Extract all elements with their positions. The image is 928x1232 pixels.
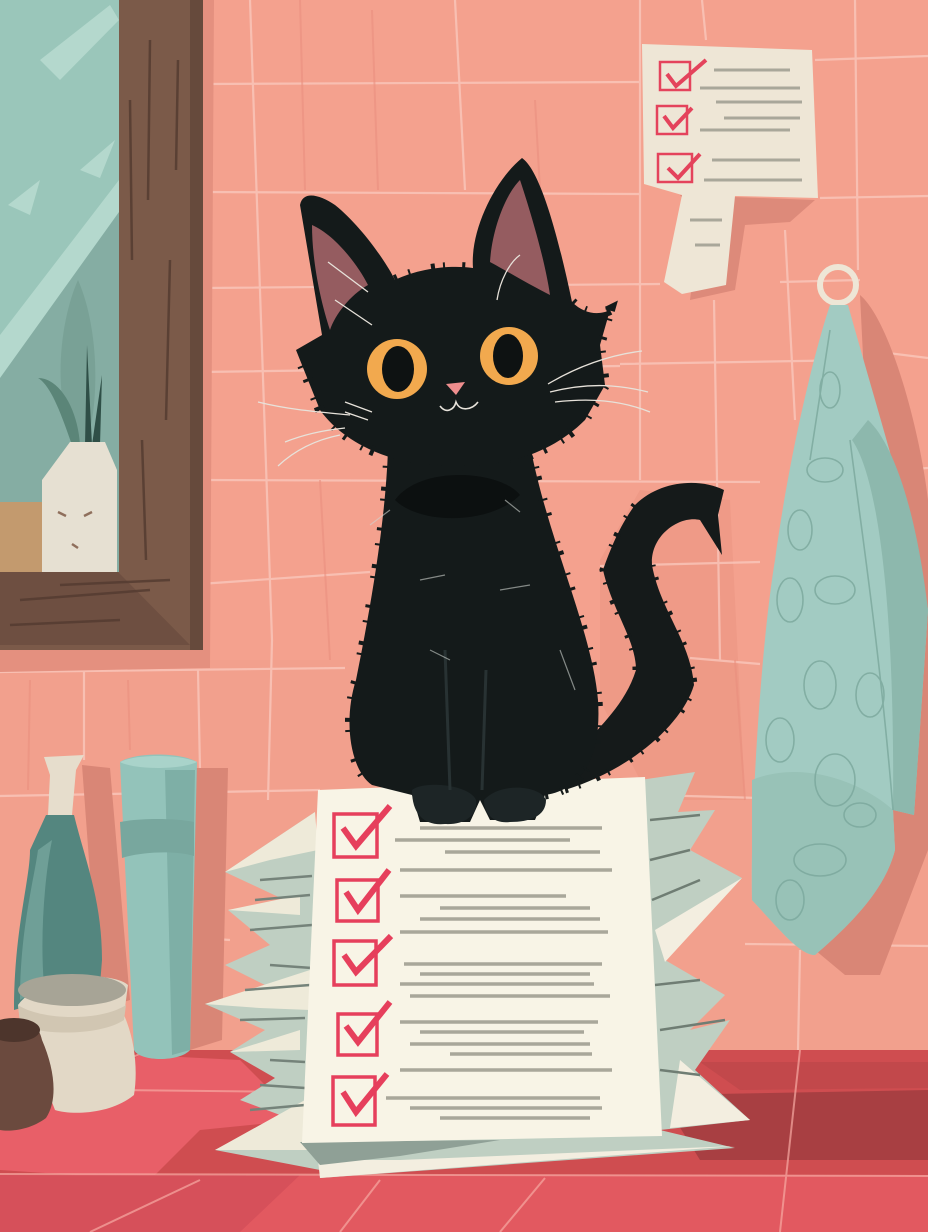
stack right sheets <box>318 772 750 1178</box>
check item 4 <box>338 1002 390 1055</box>
check item 1 <box>334 806 390 857</box>
cat head <box>296 158 610 466</box>
cat eyes <box>367 339 427 399</box>
plant in mirror <box>0 280 117 572</box>
check item 3 <box>334 936 391 985</box>
cat inner ears <box>312 225 368 330</box>
spray bottle <box>14 755 130 1010</box>
cat <box>258 158 724 824</box>
mirror shadow <box>0 0 214 672</box>
towel <box>752 267 928 975</box>
small checklist note on wall <box>642 44 818 300</box>
paper stack <box>205 772 750 1178</box>
towel ring <box>820 267 856 303</box>
stack left sheets <box>205 812 320 1170</box>
towel cloth <box>752 305 928 955</box>
cat nose and mouth <box>446 382 465 395</box>
teal bottle <box>120 754 228 1059</box>
check item 5 <box>333 1074 387 1125</box>
towel shadow <box>815 295 928 975</box>
cat body <box>349 445 598 822</box>
shadow under main sheet <box>300 1140 500 1165</box>
floor <box>0 1050 928 1232</box>
cat paws <box>412 785 546 824</box>
jar brown <box>0 1018 54 1131</box>
mirror <box>0 0 214 672</box>
jar cream <box>18 974 136 1113</box>
check item 2 <box>337 870 389 921</box>
mirror glass <box>0 0 119 572</box>
mirror frame <box>0 0 203 650</box>
cat tail <box>565 483 724 790</box>
main checklist sheet <box>302 777 662 1143</box>
cat whiskers <box>258 351 650 466</box>
text lines <box>386 828 612 1118</box>
